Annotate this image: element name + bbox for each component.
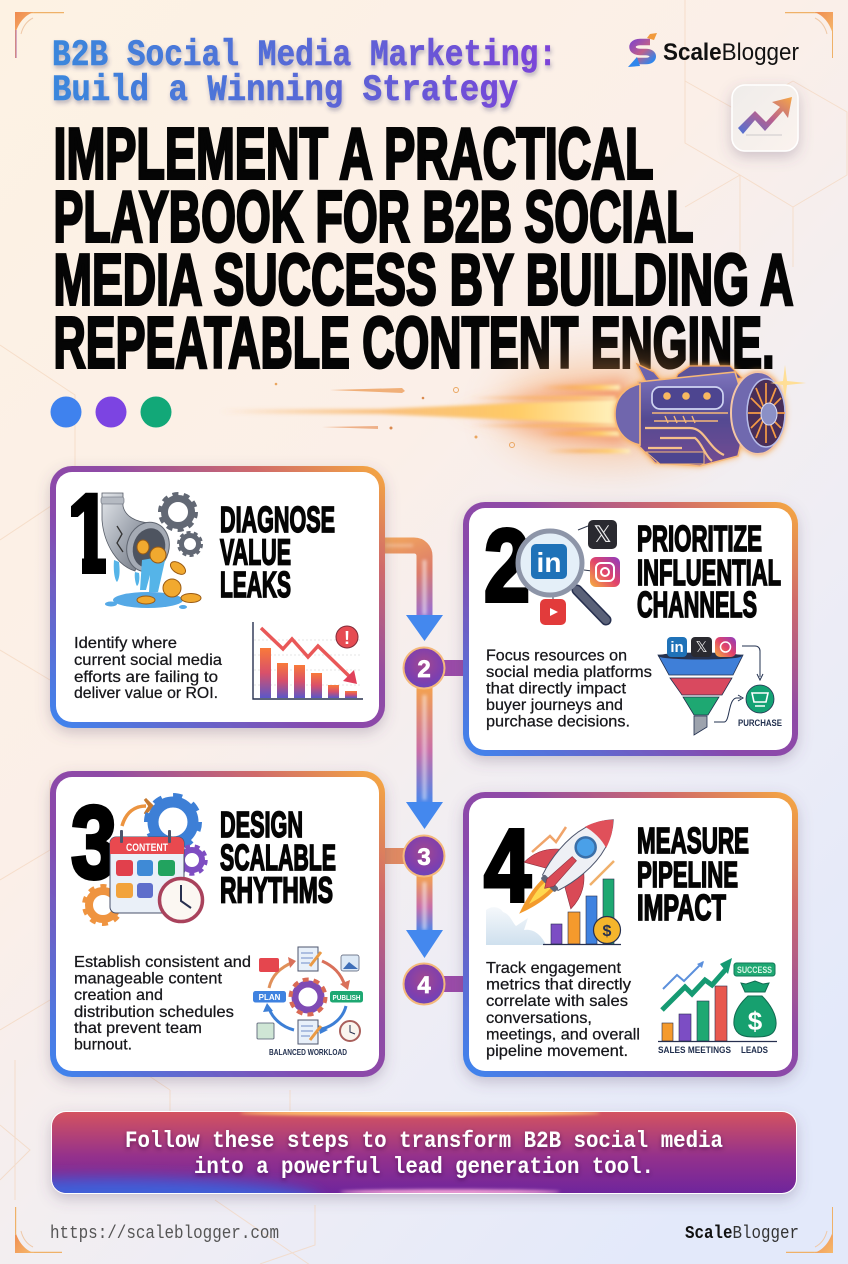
body text: Establish consistent and bbox=[74, 954, 251, 971]
step badge 3: 3 bbox=[417, 844, 431, 871]
logo wordmark: ScaleBlogger bbox=[663, 39, 799, 66]
step badge 2 bbox=[404, 648, 444, 688]
chart: growth bars and money bag: SUCCESS bbox=[737, 965, 772, 975]
engine body bbox=[615, 364, 785, 466]
number 1: 1 bbox=[67, 471, 111, 596]
heading: PIPELINE bbox=[637, 854, 738, 895]
headline bbox=[54, 114, 794, 384]
heading: DIAGNOSE bbox=[220, 499, 335, 540]
chart: balanced workload cycle: PLAN bbox=[259, 993, 281, 1002]
icon: growth arrow tile bbox=[732, 85, 798, 151]
body text: distribution schedules bbox=[74, 1004, 234, 1021]
heading: IMPACT bbox=[637, 887, 726, 928]
heading: VALUE bbox=[220, 532, 291, 572]
flame trail bbox=[220, 362, 720, 462]
body text: social media platforms bbox=[486, 664, 652, 681]
chart: purchase funnel bbox=[658, 637, 782, 735]
subtitle: B2B Social Media Marketing: bbox=[52, 35, 557, 77]
engine illustration with flame trail bbox=[220, 362, 806, 466]
chart: growth bars and money bag: $ bbox=[748, 1006, 763, 1036]
body text bbox=[74, 954, 251, 1054]
panel: step 3 design scalable rhythms bbox=[50, 771, 385, 1077]
icon: leaking pipe bbox=[101, 493, 202, 609]
footer url: https://scaleblogger.com bbox=[50, 1224, 279, 1244]
body text: buyer journeys and bbox=[486, 697, 623, 714]
body text bbox=[74, 635, 222, 702]
icon: magnifier with social tiles: in bbox=[537, 547, 561, 578]
cloud bbox=[486, 907, 546, 945]
chart: declining bars bbox=[253, 622, 363, 699]
chart: growth bars and money bag: LEADS bbox=[741, 1045, 768, 1056]
chart: balanced workload cycle: PUBLISH bbox=[332, 995, 360, 1002]
connector: step 2 to step 3 bbox=[406, 685, 443, 829]
subtitle: Build a Winning Strategy bbox=[52, 70, 518, 112]
body text: meetings, and overall bbox=[486, 1026, 640, 1044]
callout banner bbox=[45, 1110, 803, 1205]
heading: SCALABLE bbox=[220, 837, 336, 878]
callout banner: into a powerful lead generation tool. bbox=[194, 1154, 654, 1181]
icon: content calendar with gears and clock: CONTENT bbox=[126, 842, 168, 854]
subtitle bbox=[52, 35, 557, 112]
logo mark bbox=[628, 33, 657, 67]
step badge 2: 2 bbox=[417, 656, 431, 683]
body text: creation and bbox=[74, 987, 163, 1004]
heading bbox=[637, 820, 749, 928]
body text: metrics that directly bbox=[486, 976, 631, 994]
body text: Identify where bbox=[74, 635, 177, 652]
heading: LEAKS bbox=[220, 564, 291, 605]
body text bbox=[486, 960, 640, 1060]
gears bbox=[160, 494, 202, 556]
number 2: 2 bbox=[484, 508, 530, 623]
icon: content calendar with gears and clock bbox=[84, 796, 206, 924]
panel: step 4 measure pipeline impact bbox=[463, 792, 798, 1077]
body text: burnout. bbox=[74, 1036, 132, 1054]
panel: step 2 prioritize influential channels bbox=[463, 502, 798, 756]
branch lines bbox=[382, 660, 466, 992]
body text: deliver value or ROI. bbox=[74, 685, 218, 702]
heading: CHANNELS bbox=[637, 584, 757, 625]
number 4: 4 bbox=[484, 808, 531, 923]
step badge 4 bbox=[404, 964, 444, 1004]
accent dots bbox=[50, 396, 172, 428]
spark bbox=[770, 365, 806, 400]
body text: correlate with sales bbox=[486, 993, 628, 1010]
step badge 4: 4 bbox=[417, 972, 431, 999]
icon: rocket with growth bars bbox=[486, 796, 637, 945]
heading: PRIORITIZE bbox=[637, 518, 762, 559]
connector: step 3 to step 4 bbox=[406, 875, 443, 958]
chart: purchase funnel: in bbox=[670, 639, 684, 656]
callout banner: Follow these steps to transform B2B social media bbox=[125, 1128, 723, 1155]
panel: step 1 diagnose value leaks bbox=[50, 466, 385, 728]
chart: growth bars and money bag: SALES MEETINGS bbox=[658, 1045, 731, 1056]
body text: manageable content bbox=[74, 970, 223, 988]
icon: rocket with growth bars: $ bbox=[603, 923, 612, 940]
body text bbox=[486, 648, 652, 730]
heading: MEASURE bbox=[637, 820, 749, 861]
heading bbox=[637, 518, 781, 625]
body text: Focus resources on bbox=[486, 648, 627, 664]
chart: purchase funnel: 𝕏 bbox=[695, 639, 708, 656]
rocket bbox=[496, 796, 637, 937]
body text: Track engagement bbox=[486, 960, 622, 977]
connector: card 1 to step 2 bbox=[380, 544, 443, 641]
number 3: 3 bbox=[71, 785, 117, 900]
footer brand: ScaleBlogger bbox=[685, 1224, 799, 1244]
body text: current social media bbox=[74, 652, 222, 669]
body text: conversations, bbox=[486, 1010, 592, 1027]
icon: magnifier with social tiles: 𝕏 bbox=[593, 521, 612, 547]
step badge 3 bbox=[404, 836, 444, 876]
chart: declining bars: ! bbox=[344, 628, 350, 648]
body text: pipeline movement. bbox=[486, 1043, 628, 1060]
heading bbox=[220, 804, 336, 910]
heading: DESIGN bbox=[220, 804, 303, 845]
heading bbox=[220, 499, 335, 605]
body text: that prevent team bbox=[74, 1020, 202, 1037]
body text: purchase decisions. bbox=[486, 714, 630, 730]
heading: RHYTHMS bbox=[220, 870, 333, 910]
logo: ScaleBlogger bbox=[628, 33, 799, 67]
chart: purchase funnel: PURCHASE bbox=[738, 718, 782, 728]
chart: growth bars and money bag bbox=[658, 958, 777, 1056]
chart: balanced workload cycle bbox=[253, 947, 363, 1057]
chart: balanced workload cycle: BALANCED WORKLOAD bbox=[269, 1047, 347, 1057]
body text: that directly impact bbox=[486, 680, 627, 698]
body text: efforts are failing to bbox=[74, 669, 218, 686]
coins bbox=[137, 540, 201, 604]
connector arrows between steps bbox=[380, 544, 466, 1004]
icon: magnifier with social tiles bbox=[518, 520, 620, 625]
